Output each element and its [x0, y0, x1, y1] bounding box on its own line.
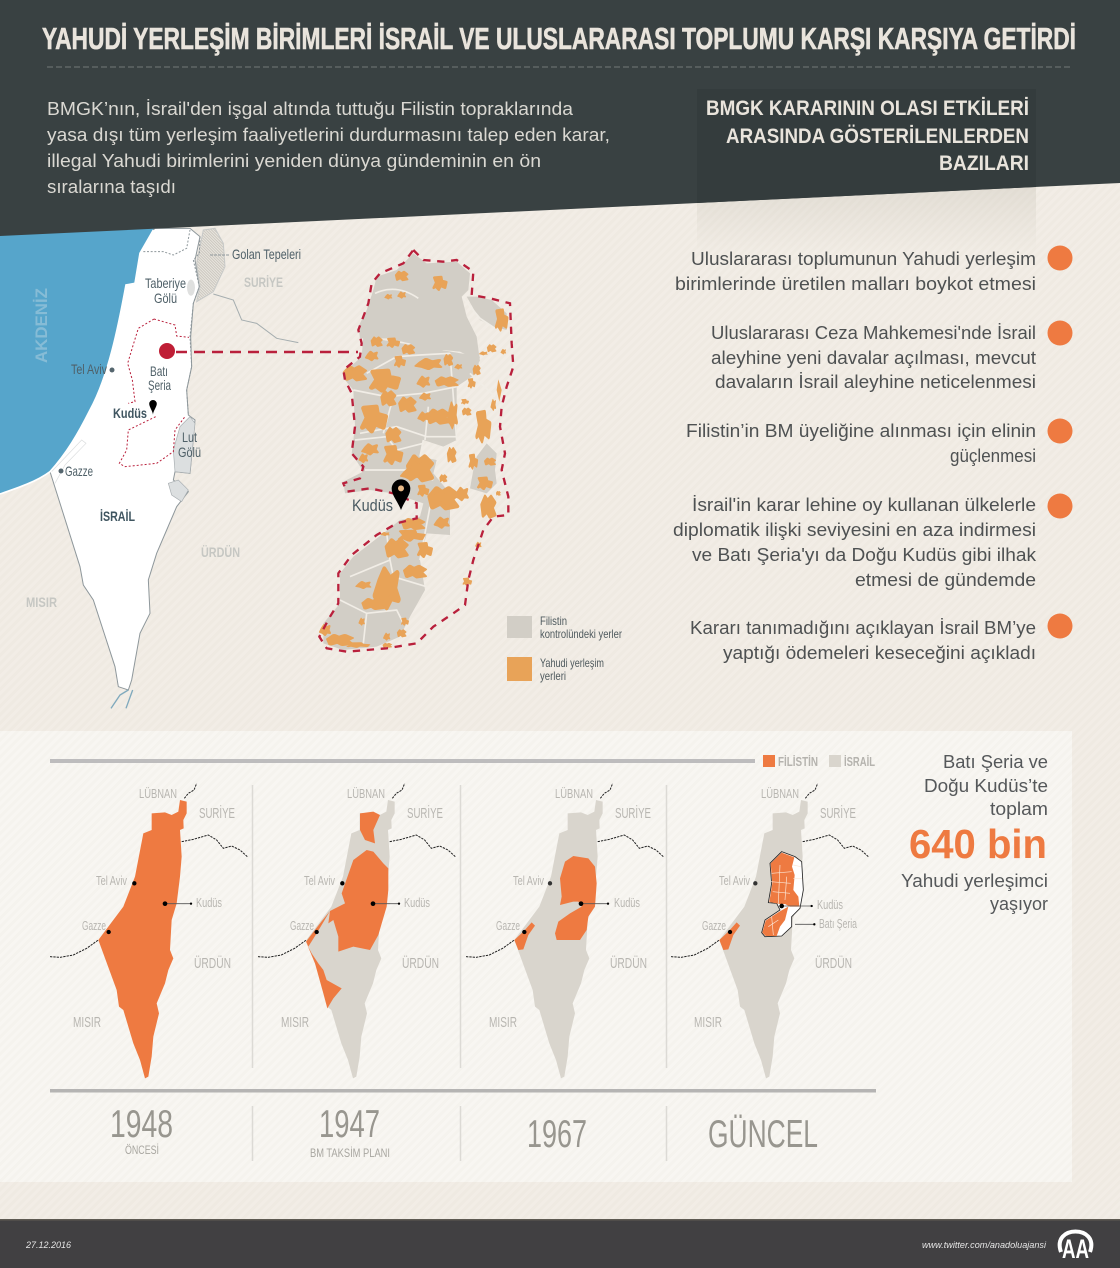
map: current: Batı Şeria [819, 916, 858, 931]
map: before 1948: LÜBNAN [139, 786, 177, 801]
neighbour labels [26, 274, 283, 610]
timeline legend [763, 754, 875, 769]
effect 4: diplomatik ilişki seviyesini en aza indirmesi [673, 520, 1036, 540]
Golan Heights hatched area [197, 228, 225, 302]
statistic callout: Yahudi yerleşimci [901, 871, 1048, 891]
effect 1: birimlerinde üretilen malları boykot etmesi [675, 274, 1036, 294]
sea: Akdeniz [0, 220, 160, 494]
year labels: GÜNCEL [708, 1113, 818, 1156]
map labels: İSRAİL [100, 508, 135, 524]
map: 1947 UN partition plan: MISIR [281, 1014, 309, 1031]
map: current: Tel Aviv [719, 873, 750, 888]
map labels: Lut [182, 429, 197, 445]
effect 3 [686, 418, 1072, 466]
map labels: Şeria [148, 377, 171, 393]
year labels: 1947 [319, 1103, 380, 1146]
Palestinian controlled land [323, 253, 507, 650]
West Bank settlement map [319, 250, 513, 652]
map: current: Gazze [702, 918, 726, 933]
effect 2: Uluslararası Ceza Mahkemesi'nde İsrail [711, 323, 1036, 343]
map: current: ÜRDÜN [815, 954, 852, 972]
timeline legend: FİLİSTİN [778, 754, 818, 769]
map: 1967: LÜBNAN [555, 786, 593, 801]
statistic callout: 640 bin [909, 821, 1047, 867]
map: before 1948 [50, 783, 247, 1078]
map labels: Batı [150, 363, 168, 379]
effect 1: Uluslararası toplumunun Yahudi yerleşim [691, 249, 1036, 269]
intro text [47, 99, 610, 197]
Sea of Galilee [187, 280, 195, 296]
red locator dot [159, 343, 175, 359]
Dead Sea south basin [168, 480, 188, 502]
effect 2 [711, 320, 1072, 392]
effect 4: ve Batı Şeria'yı da Doğu Kudüs gibi ilhak [692, 545, 1037, 565]
legend swatch: Palestinian [507, 616, 532, 638]
statistic callout: toplam [990, 799, 1048, 819]
neighbour labels: SURİYE [244, 274, 283, 290]
intro text: illegal Yahudi birimlerini yeniden dünya gündeminin en ön [47, 151, 541, 171]
footer [0, 1219, 1120, 1268]
effects heading box shadow [697, 183, 1036, 253]
statistic callout: Batı Şeria ve [943, 752, 1048, 772]
effect 2: aleyhine yeni davalar açılması, mevcut [711, 348, 1036, 368]
map: 1967: ÜRDÜN [610, 954, 647, 972]
date: 27.12.2016 [25, 1240, 71, 1250]
legend: settlements map: kontrolündeki yerler [540, 627, 622, 641]
white gaps [340, 289, 495, 643]
settlement blobs [320, 272, 507, 647]
effect 4: İsrail'in karar lehine oy kullanan ülkelerle [692, 495, 1036, 515]
effects heading: BAZILARI [939, 152, 1029, 175]
statistic callout: yaşıyor [990, 894, 1048, 914]
Eilat lines [111, 690, 133, 708]
timeline legend: İSRAİL [844, 754, 875, 769]
Golan leader [210, 254, 230, 256]
West Bank outline [119, 319, 189, 467]
Syria border [213, 294, 298, 343]
year labels [110, 1103, 818, 1160]
effect 5: yaptığı ödemeleri keseceğini açıkladı [723, 643, 1036, 663]
map: current: MISIR [694, 1014, 722, 1031]
map labels: Gazze [65, 463, 93, 479]
map: 1947 UN partition plan: Tel Aviv [304, 873, 335, 888]
map: current [671, 783, 868, 1078]
legend: settlements map: Filistin [540, 614, 567, 628]
map labels: Tel Aviv [71, 361, 107, 377]
narrow settlement [497, 379, 502, 402]
timeline panel [0, 731, 1072, 1182]
map: before 1948: ÜRDÜN [194, 954, 231, 972]
armistice dotted border [143, 230, 200, 415]
effect 2: davaların İsrail aleyhine neticelenmesi [715, 372, 1036, 392]
leader line [176, 351, 358, 353]
coastline [0, 230, 153, 494]
effect 4: etmesi de gündemde [855, 570, 1036, 590]
map: 1967 [466, 783, 663, 1078]
effects heading: BMGK KARARININ OLASI ETKİLERİ [706, 97, 1029, 120]
map: 1967: SURİYE [615, 804, 651, 822]
neighbour labels: AKDENİZ [32, 288, 51, 363]
effect 5: Kararı tanımadığını açıklayan İsrail BM’ye [690, 618, 1036, 638]
legend: settlements map [507, 614, 622, 683]
map: 1947 UN partition plan: Gazze [290, 918, 314, 933]
red dashed boundary [319, 250, 513, 652]
header band [0, 0, 1120, 236]
top rule [50, 759, 755, 763]
legend swatch: settlements [507, 657, 532, 681]
map: current: Kudüs [817, 897, 843, 912]
separators [252, 785, 666, 1161]
twitter url: www.twitter.com/anadoluajansi [922, 1240, 1047, 1250]
map: before 1948: Tel Aviv [96, 873, 127, 888]
list of possible effects [673, 246, 1072, 663]
map labels: Golan Tepeleri [232, 246, 301, 262]
map: 1967: Tel Aviv [513, 873, 544, 888]
map labels: Taberiye [145, 275, 186, 291]
effect 3: güçlenmesi [950, 446, 1036, 466]
statistic callout: Doğu Kudüs’te [924, 776, 1048, 796]
effects heading [697, 89, 1036, 203]
Kudüs label: Kudüs [352, 496, 393, 515]
Kudüs pin large [392, 479, 410, 510]
map: before 1948: Kudüs [196, 895, 222, 910]
year labels: 1967 [527, 1113, 587, 1156]
Gaza strip outline [52, 440, 86, 483]
year labels: ÖNCESİ [125, 1143, 159, 1157]
effect 1 [675, 246, 1072, 294]
legend: settlements map: yerleri [540, 669, 566, 683]
map: current: LÜBNAN [761, 786, 799, 801]
map: before 1948: MISIR [73, 1014, 101, 1031]
year labels: 1948 [110, 1103, 173, 1146]
Anadolu Agency logo [1060, 1232, 1091, 1264]
map: 1947 UN partition plan [258, 783, 455, 1078]
map: 1947 UN partition plan: ÜRDÜN [402, 954, 439, 972]
map: 1967: MISIR [489, 1014, 517, 1031]
map: 1947 UN partition plan: LÜBNAN [347, 786, 385, 801]
map: 1967: Kudüs [614, 895, 640, 910]
map: 1947 UN partition plan: SURİYE [407, 804, 443, 822]
map: 1967: Gazze [496, 918, 520, 933]
map: 1947 UN partition plan: Kudüs [404, 895, 430, 910]
map labels: Gölü [178, 444, 201, 460]
Anadolu Agency logo: AA [1062, 1234, 1089, 1264]
city dots [58, 368, 114, 474]
intro text: BMGK’nın, İsrail'den işgal altında tuttuğu Filistin topraklarında [47, 99, 574, 119]
Kudüs pin [149, 400, 157, 415]
map labels: Gölü [154, 290, 177, 306]
neighbour labels: MISIR [26, 594, 57, 610]
legend: settlements map: Yahudi yerleşim [540, 656, 604, 670]
year labels: BM TAKSİM PLANI [310, 1146, 390, 1160]
map labels: Kudüs [113, 405, 147, 421]
map: before 1948: Gazze [82, 918, 106, 933]
map labels [65, 246, 301, 524]
Dead Sea [173, 417, 195, 473]
statistic callout [901, 752, 1048, 914]
bottom rule [50, 1089, 876, 1092]
map: current: SURİYE [820, 804, 856, 822]
effect 3: Filistin’in BM üyeliğine alınması için elinin [686, 421, 1036, 441]
effects heading: ARASINDA GÖSTERİLENLERDEN [726, 125, 1029, 148]
neighbour labels: ÜRDÜN [201, 544, 240, 560]
effect 5 [690, 614, 1072, 663]
intro text: sıralarına taşıdı [47, 177, 176, 197]
location map of Israel and the West Bank [0, 220, 358, 708]
land: Israel [50, 228, 200, 690]
effect 4 [673, 494, 1072, 590]
intro text: yasa dışı tüm yerleşim faaliyetlerini durdurmasını talep eden karar, [47, 125, 610, 145]
map: before 1948: SURİYE [199, 804, 235, 822]
